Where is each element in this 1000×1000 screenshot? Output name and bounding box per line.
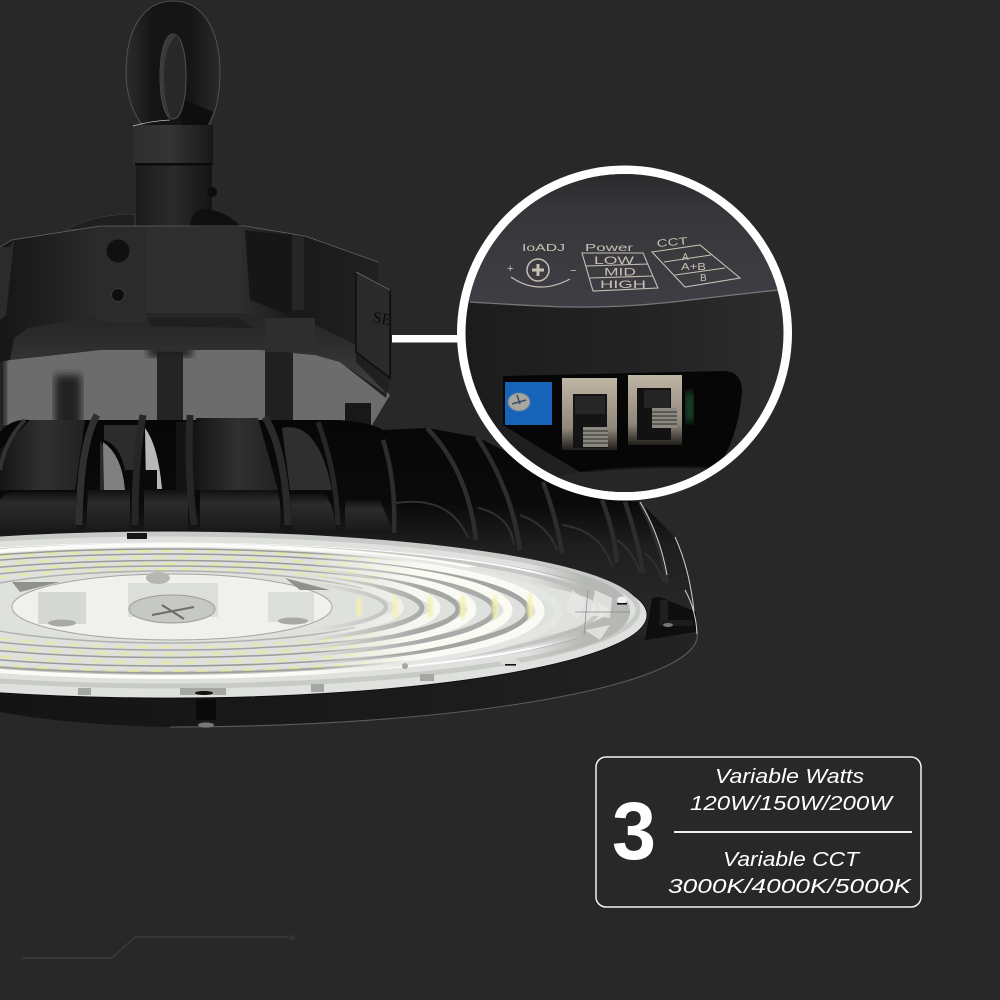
central hub (12, 572, 332, 640)
translucent outer zone (536, 566, 630, 654)
lens rim clips (78, 663, 434, 695)
blue trimmer (505, 382, 552, 425)
slate top cap (460, 170, 790, 307)
IoADJ dial icon (507, 259, 576, 287)
outer rim (0, 632, 697, 727)
driver housing (0, 226, 393, 398)
printed labels: Power (585, 242, 634, 254)
cap edge highlight (470, 290, 778, 307)
CCT table (652, 245, 740, 287)
recess with right mounting pin (645, 590, 697, 640)
variable watts text (690, 765, 894, 815)
printed labels (507, 235, 740, 291)
connector line (392, 335, 462, 342)
badge number: 3 (612, 786, 656, 877)
CCT table: B (700, 273, 707, 284)
heat sink fins, right group (383, 428, 694, 612)
spec badge (596, 757, 921, 907)
bottom lip (554, 466, 710, 492)
heat sink body (0, 420, 697, 640)
power table: LOW (594, 255, 635, 267)
power table: MID (604, 266, 636, 278)
fin blades (383, 428, 643, 573)
switch window (503, 371, 742, 472)
glass pins (500, 596, 627, 666)
yellow LED glints (356, 593, 533, 620)
badge divider (674, 831, 912, 833)
gray underside with posts (0, 345, 390, 477)
dark lower body (460, 170, 790, 500)
curved fin blades (0, 415, 338, 525)
power slide switch (562, 378, 617, 450)
CCT table: A (682, 252, 689, 263)
adjustment holes (106, 240, 130, 302)
CCT slide switch (628, 375, 682, 445)
decorative circuit line (22, 935, 295, 958)
printed labels: IoADJ (522, 242, 565, 254)
power table (582, 253, 658, 291)
drum ring segments (0, 490, 392, 530)
inset detail circle (457, 166, 792, 500)
variable CCT text (668, 848, 913, 898)
power table: HIGH (600, 279, 646, 291)
variable watts text: Variable Watts (715, 765, 864, 788)
variable CCT text: 3000K/4000K/5000K (668, 875, 913, 898)
green glow (686, 392, 693, 422)
LED rows (0, 543, 478, 679)
high bay lamp product illustration (0, 1, 697, 728)
IoADJ dial icon: + (507, 263, 513, 275)
brand plate (356, 272, 393, 378)
printed labels: CCT (656, 235, 689, 250)
lens outer rings (0, 534, 638, 686)
right-hand reflector slats (320, 552, 544, 672)
hanging collar and tube (65, 120, 242, 230)
heat sink fins, left group (0, 415, 392, 530)
LED lens disc (0, 532, 647, 698)
lower drum arcs (396, 502, 664, 582)
variable CCT text: Variable CCT (723, 848, 861, 871)
eye bolt (126, 1, 220, 137)
IoADJ dial icon: − (570, 265, 576, 277)
CCT table: A+B (681, 262, 706, 273)
dark pins on the rim (127, 533, 216, 728)
variable watts text: 120W/150W/200W (690, 792, 894, 815)
brand plate: SE (371, 309, 393, 329)
